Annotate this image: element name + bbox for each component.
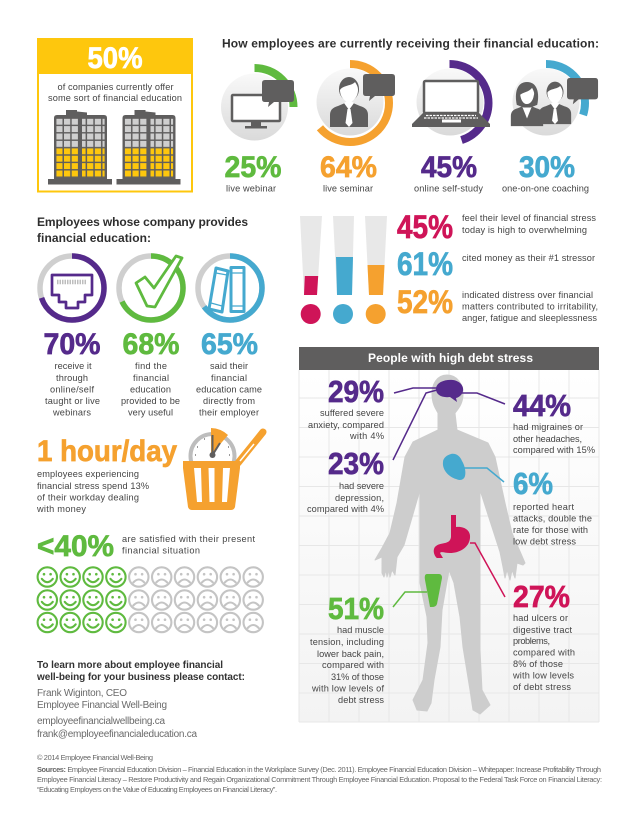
item: 68% find useful [119,256,183,418]
label: live webinar: live webinar [226,184,276,194]
text: companies offering education: some sort of financial education [48,93,182,103]
text: financial stress time: employees experiencing [37,469,139,479]
icon: exclamation mark 61% [333,216,354,324]
heading: how employees receive education: How employees are currently receiving their financial education: [222,36,599,50]
icon: speech bubble [262,80,294,107]
text: sources: “Educating Employers on the Value of Educating Employees on Financial Literacy”. [37,785,277,794]
text: migraines [513,422,595,455]
block: contact information [36,660,245,740]
text: find the financial education [121,361,180,418]
heading: learn more [36,660,245,683]
text: migraines: had migraines or [513,422,583,432]
text: heart attacks: low debt stress [513,536,576,546]
icon: check mark [136,256,182,307]
text: anxiety [308,408,384,441]
text: web and email: employeefinancialwellbeing.ca [37,716,165,727]
organ: brain [393,380,505,460]
stat: 65%: 65% [201,328,258,361]
text: said their financial education: education came [196,384,262,394]
text: ulcers: of debt stress [513,682,571,692]
heading: employees whose company provides: Employees whose company provides [37,215,248,229]
text: receive it through: taught or live [45,396,100,406]
text: sources [37,765,602,794]
text: find the financial education: provided to be [121,396,180,406]
stat: 50%: 50% [88,42,142,75]
icon: network port [52,275,92,308]
text: financial stress time: of their workday dealing [37,492,139,502]
text: distress symptoms: anger, fatigue and sleeplessness [462,313,597,323]
icon: office building left [48,110,112,184]
text: financial stress time: with money [36,504,86,514]
text: ulcers: problems, [513,636,550,646]
text: depression: depression, [335,493,384,503]
text: depression [307,481,384,514]
text: receive it through [45,361,100,418]
text: satisfied with finances [122,534,255,556]
text: ulcers: with low levels [512,670,574,680]
icon: clock and pen in basket [183,428,263,510]
stat: 23%: 23% [328,446,384,481]
text: muscle tension: with low levels of [311,684,384,694]
footer: copyright and sources [37,753,602,794]
text: muscle tension: debt stress [338,695,384,705]
item: online self-study [410,64,490,194]
text: receive it through: through [56,373,88,383]
heading: learn more: To learn more about employee financial [37,660,223,671]
text: web and email: frank@employeefinancialeducation.ca [37,729,197,740]
stat: 45%: 45% [397,209,453,245]
heading text: People with high debt stress [368,351,533,365]
stat: 68%: 68% [122,328,180,361]
stat: 1 hour/day: 1 hour/day [37,435,177,468]
stat: 45%: 45% [421,151,477,184]
icon: exclamation mark 45% [300,216,322,324]
text: find the financial education: financial [133,373,169,383]
footer: copyright and sources: © 2014 Employee Financial Well-Being [37,753,153,762]
muscle: thigh [393,574,442,607]
stat: 6%: 6% [513,466,553,501]
heading: employees whose company provides [37,215,248,245]
icon: businessman [330,77,368,127]
text: anxiety: with 4% [349,431,384,441]
text: said their financial education: their employer [199,408,259,418]
stat: 64%: 64% [320,151,377,184]
text: ulcers: 8% of those [513,659,563,669]
heading bar [299,347,599,370]
label: live seminar: live seminar [323,184,373,194]
text: stress level: today is high to overwhelming [462,225,587,235]
text: said their financial education: directly from [203,396,255,406]
text: distress symptoms: indicated distress over financial [462,290,593,300]
stat: 70%: 70% [44,328,100,361]
text: contact name [37,688,167,711]
text: migraines: compared with 15% [513,445,595,455]
icon: man [539,82,571,124]
text: web and email [37,716,197,740]
stat: 61%: 61% [397,246,453,282]
text: distress symptoms [462,290,598,323]
text: depression: had severe [339,481,384,491]
label: one-on-one coaching: one-on-one coaching [502,184,589,194]
block: one hour per day [36,428,263,514]
text: financial stress time [36,469,149,514]
text: stress level [462,213,596,235]
text: receive it through: webinars [52,408,91,418]
text: ulcers: had ulcers or [513,613,568,623]
icon: speech bubble [363,74,395,101]
text: receive it through: receive it [54,361,92,371]
text: anxiety: anxiety, compared [308,420,384,430]
item: live webinar [216,68,294,194]
stat: 44%: 44% [513,388,571,423]
icon: office building right [116,110,180,184]
icon: books [209,268,244,312]
block: under 40% satisfied [37,530,263,632]
item: one-on-one coaching [502,64,598,194]
text: companies offering education: of companies currently offer [58,82,174,92]
text: top stressor: cited money as their #1 stressor [462,253,595,263]
text: sources: Sources: Employee Financial Education Division – Financial Education in the Workplace Survey (Dec. 2011). Employee Financial Education Division – Whitepaper: Increase Profitability Through [37,765,601,774]
icon: monitor [232,95,280,128]
text: receive it through: online/self [50,384,94,394]
text: muscle tension: tension, including [310,637,384,647]
panel: people with high debt stress [299,347,599,722]
panel: financial stress exclamation marks [300,209,598,324]
text: find the financial education: education [130,384,171,394]
heading: employees whose company provides: financial education: [37,231,151,245]
text: depression: compared with 4% [307,504,384,514]
text: muscle tension: had muscle [337,625,384,635]
text: muscle tension: 31% of those [331,672,384,682]
illustration: body silhouette [375,375,525,714]
text: find the financial education: very useful [128,408,173,418]
text: sources: Employee Financial Literacy – Restore Productivity and Regain Organizational Commitment Through Employee Financial Education. Proposal to the Federal Task Force on Financial Literacy: [37,775,602,784]
panel: 50% of companies [37,38,193,192]
text: stress level: feel their level of financial stress [462,213,596,223]
text: financial stress time: financial stress spend 13% [37,481,149,491]
item: live seminar [311,64,395,194]
stat: 29%: 29% [328,374,384,409]
item: 65% from employer [196,256,262,418]
text: distress symptoms: matters contributed to irritability, [462,302,598,312]
item: 70% receive it online [40,256,104,418]
organ: heart [443,454,504,482]
text: ulcers [512,613,575,692]
icon: speech bubble [567,78,598,104]
text: heart attacks [513,502,592,546]
stat: 27%: 27% [513,579,570,614]
icon: exclamation mark 52% [365,216,387,324]
text: muscle tension: compared with [322,660,384,670]
text: ulcers: digestive tract [513,625,572,635]
text: heart attacks: rate for those with [513,525,588,535]
text: said their financial education: financial [211,373,247,383]
text: find the financial education: find the [135,361,167,371]
stat: 25%: 25% [224,151,282,184]
text: anxiety: suffered severe [320,408,384,418]
label: online self-study: online self-study [414,184,483,194]
text: contact name: Employee Financial Well-Being [37,700,167,711]
chart: smiley faces [38,567,263,632]
heading: learn more: well-being for your business please contact: [36,672,245,683]
text: said their financial education: said their [210,361,248,371]
icon: laptop [412,81,490,127]
text: companies offering education [48,82,182,103]
text: heart attacks: reported heart [513,502,574,512]
text: satisfied with finances: financial situation [122,546,200,556]
text: heart attacks: attacks, double the [513,514,592,524]
stat: 51%: 51% [328,591,384,626]
text: said their financial education [196,361,262,418]
text: migraines: other headaches, [513,434,582,444]
stat: 30%: 30% [519,151,575,184]
text: satisfied with finances: are satisfied with their present [122,534,255,544]
stat: 52%: 52% [397,284,453,320]
text: contact name: Frank Wiginton, CEO [37,688,127,699]
text: ulcers: compared with [513,648,575,658]
text: muscle tension: lower back pain, [317,649,384,659]
stat: <40%: <40% [37,530,114,563]
icon: woman [511,82,543,126]
text: muscle tension [310,625,384,705]
organ: stomach [434,515,505,597]
